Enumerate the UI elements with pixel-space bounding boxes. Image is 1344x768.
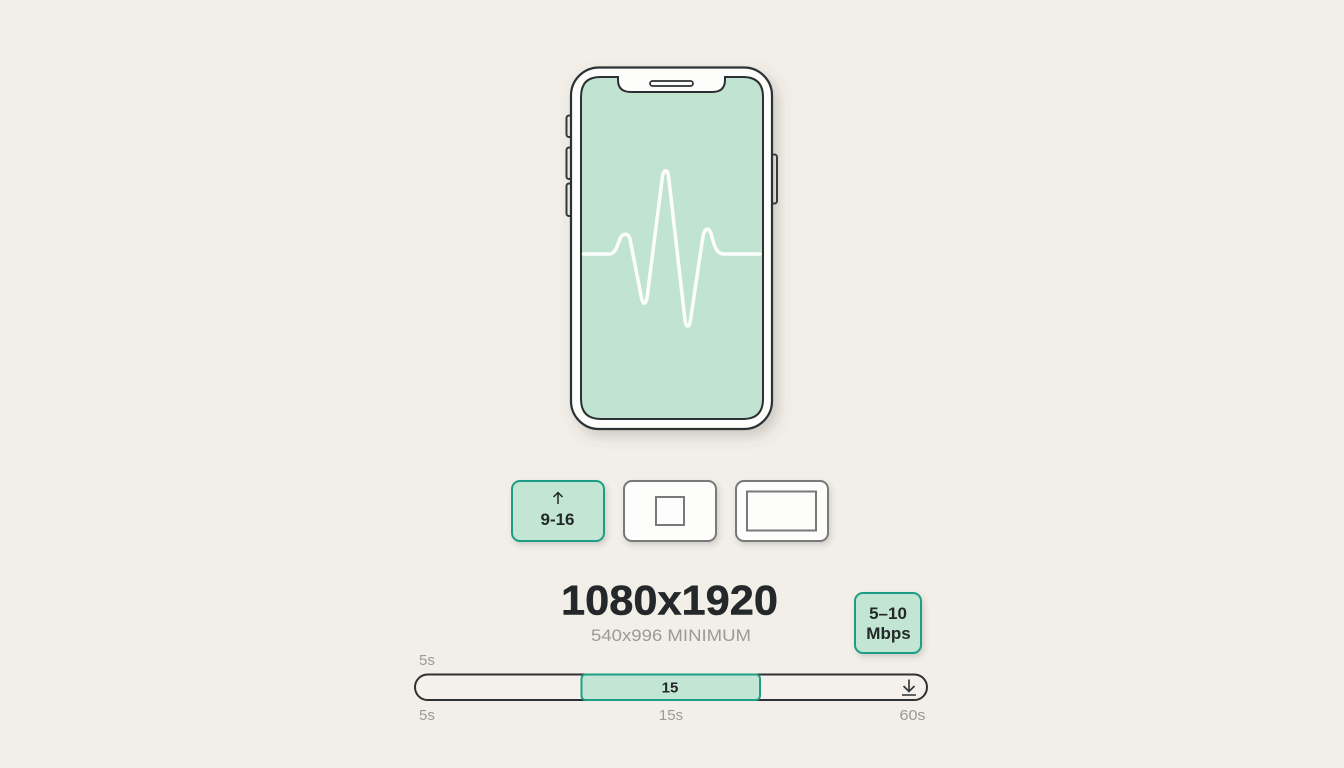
duration slider	[415, 652, 927, 724]
phone screen with notch	[581, 77, 763, 419]
selected range	[582, 674, 760, 700]
phone side buttons	[566, 116, 777, 216]
heartbeat waveform	[584, 171, 760, 326]
icon: up arrow	[554, 492, 562, 504]
aspect ratio options	[512, 481, 828, 541]
phone speaker	[650, 81, 693, 86]
option: landscape	[736, 481, 828, 541]
option: square	[624, 481, 716, 541]
resolution heading: 1080x1920	[561, 576, 778, 624]
slider track	[415, 674, 927, 700]
phone illustration	[566, 68, 777, 429]
ratio label: 9-16	[540, 510, 575, 529]
axis labels: 15s	[659, 707, 683, 724]
selected value: 15	[662, 680, 678, 696]
icon: download arrow	[902, 680, 916, 695]
axis labels	[419, 707, 926, 724]
bitrate badge	[855, 593, 921, 653]
top-left label: 5s	[419, 652, 435, 669]
phone body	[571, 68, 772, 429]
minimum resolution text: 540x996 MINIMUM	[591, 626, 751, 645]
axis labels: 5s	[419, 707, 435, 724]
axis labels: 60s	[900, 707, 926, 724]
bitrate badge: 5–10	[869, 604, 907, 623]
bitrate badge: Mbps	[866, 624, 911, 643]
option: 9-16 selected	[512, 481, 604, 541]
